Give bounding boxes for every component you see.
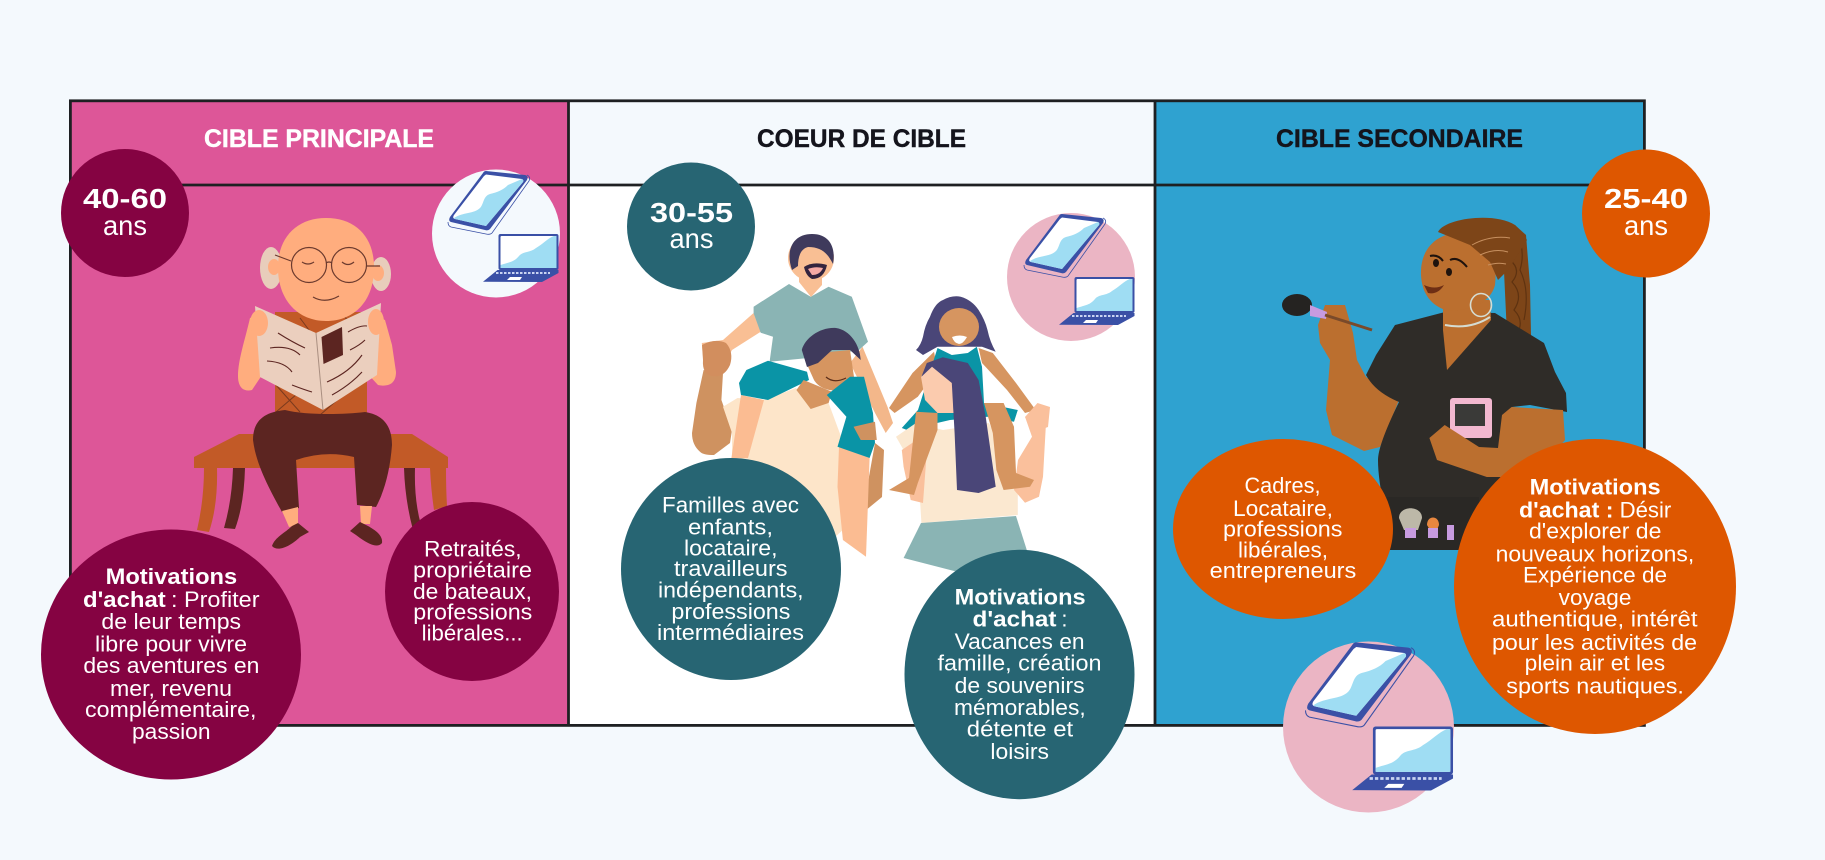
- badge: age 40-60: [61, 149, 189, 277]
- badge: age 40-60: 40-60: [83, 183, 167, 214]
- callout: motivations coeur de cible: mémorables,: [954, 695, 1086, 720]
- callout: profil coeur de cible: professions: [671, 599, 790, 624]
- callout: motivations cible secondaire: authentique, intérêt: [1492, 607, 1698, 632]
- callout: motivations cible principale: d'achat: [83, 587, 166, 612]
- callout: profil cible secondaire: libérales,: [1238, 538, 1328, 563]
- callout: motivations cible secondaire: Expérience de: [1523, 563, 1667, 588]
- panel: cible secondaire: [1155, 101, 1644, 725]
- heading: cible principale: CIBLE PRINCIPALE: [204, 125, 434, 153]
- callout: profil coeur de cible: indépendants,: [658, 578, 804, 603]
- callout: motivations cible principale: [41, 530, 301, 780]
- illustration: family with children on shoulders: [692, 234, 1050, 572]
- callout: motivations cible principale: complémentaire,: [85, 697, 256, 722]
- callout: motivations coeur de cible: de souvenirs: [955, 673, 1085, 698]
- badge: age 25-40: [1582, 150, 1710, 278]
- panel: coeur de cible: [569, 101, 1155, 725]
- illustration: old man reading newspaper on bench: [194, 218, 448, 549]
- callout: profil coeur de cible: intermédiaires: [657, 620, 804, 645]
- heading: coeur de cible: COEUR DE CIBLE: [757, 125, 966, 153]
- badge: age 25-40: ans: [1624, 210, 1668, 241]
- badge: age 30-55: [627, 162, 755, 290]
- callout: motivations cible secondaire: nouveaux horizons,: [1496, 542, 1694, 567]
- icon: phone and laptop on pale circle: [432, 170, 560, 298]
- heading: cible secondaire: CIBLE SECONDAIRE: [1276, 125, 1523, 153]
- panel: cible principale: [70, 101, 569, 725]
- callout: profil cible principale: professions: [413, 599, 532, 624]
- callout: motivations coeur de cible: Vacances en: [955, 629, 1085, 654]
- icon: phone and laptop on large pink circle: [1283, 642, 1454, 812]
- callout: motivations coeur de cible: :: [1061, 607, 1068, 632]
- callout: motivations cible secondaire: pour les activités de: [1492, 630, 1697, 655]
- callout: profil cible secondaire: Locataire,: [1233, 496, 1333, 521]
- callout: motivations coeur de cible: famille, création: [938, 651, 1102, 676]
- callout: motivations coeur de cible: Motivations: [955, 584, 1086, 609]
- badge: age 30-55: 30-55: [650, 197, 733, 228]
- callout: profil coeur de cible: [621, 458, 841, 680]
- callout: profil cible secondaire: [1173, 439, 1393, 619]
- callout: motivations cible principale: passion: [132, 719, 210, 744]
- table grid lines: [70, 100, 1645, 726]
- callout: profil cible secondaire: Cadres,: [1244, 473, 1320, 498]
- callout: profil cible principale: Retraités,: [424, 537, 522, 562]
- callout: motivations cible secondaire: sports nautiques.: [1506, 673, 1684, 698]
- callout: motivations coeur de cible: détente et: [967, 717, 1073, 742]
- callout: motivations cible secondaire: plein air et les: [1525, 651, 1665, 676]
- icon: phone and laptop on pink circle: [1007, 213, 1135, 341]
- callout: profil cible principale: libérales...: [422, 621, 523, 646]
- callout: motivations coeur de cible: loisirs: [990, 739, 1049, 764]
- callout: motivations cible secondaire: d'achat :: [1519, 497, 1614, 522]
- callout: motivations cible principale: : Profiter: [171, 587, 260, 612]
- callout: profil coeur de cible: travailleurs: [674, 556, 788, 581]
- callout: motivations cible secondaire: d'explorer de: [1529, 518, 1661, 543]
- badge: age 25-40: 25-40: [1604, 183, 1688, 214]
- callout: motivations cible principale: libre pour vivre: [95, 632, 247, 656]
- callout: motivations coeur de cible: d'achat: [972, 607, 1057, 632]
- callout: motivations cible secondaire: Désir: [1620, 497, 1671, 522]
- callout: motivations cible secondaire: Motivations: [1530, 474, 1661, 499]
- callout: profil coeur de cible: Familles avec: [662, 493, 799, 518]
- callout: profil coeur de cible: enfants,: [688, 514, 773, 539]
- callout: profil cible principale: propriétaire: [413, 558, 532, 583]
- callout: motivations cible principale: des aventures en: [83, 653, 259, 678]
- callout: profil cible secondaire: entrepreneurs: [1210, 558, 1356, 583]
- badge: age 30-55: ans: [670, 223, 714, 254]
- callout: motivations cible principale: mer, revenu: [110, 676, 232, 701]
- callout: profil cible principale: [385, 502, 559, 681]
- callout: profil cible principale: de bateaux,: [413, 579, 532, 604]
- callout: profil coeur de cible: locataire,: [684, 536, 778, 561]
- callout: motivations cible principale: de leur temps: [101, 609, 241, 634]
- callout: motivations cible principale: Motivations: [106, 564, 237, 589]
- illustration: make-up artist woman: [1282, 218, 1567, 550]
- badge: age 40-60: ans: [103, 210, 147, 241]
- callout: profil cible secondaire: professions: [1223, 517, 1342, 542]
- callout: motivations cible secondaire: [1454, 439, 1736, 734]
- callout: motivations cible secondaire: voyage: [1559, 585, 1631, 610]
- callout: motivations coeur de cible: [904, 550, 1134, 799]
